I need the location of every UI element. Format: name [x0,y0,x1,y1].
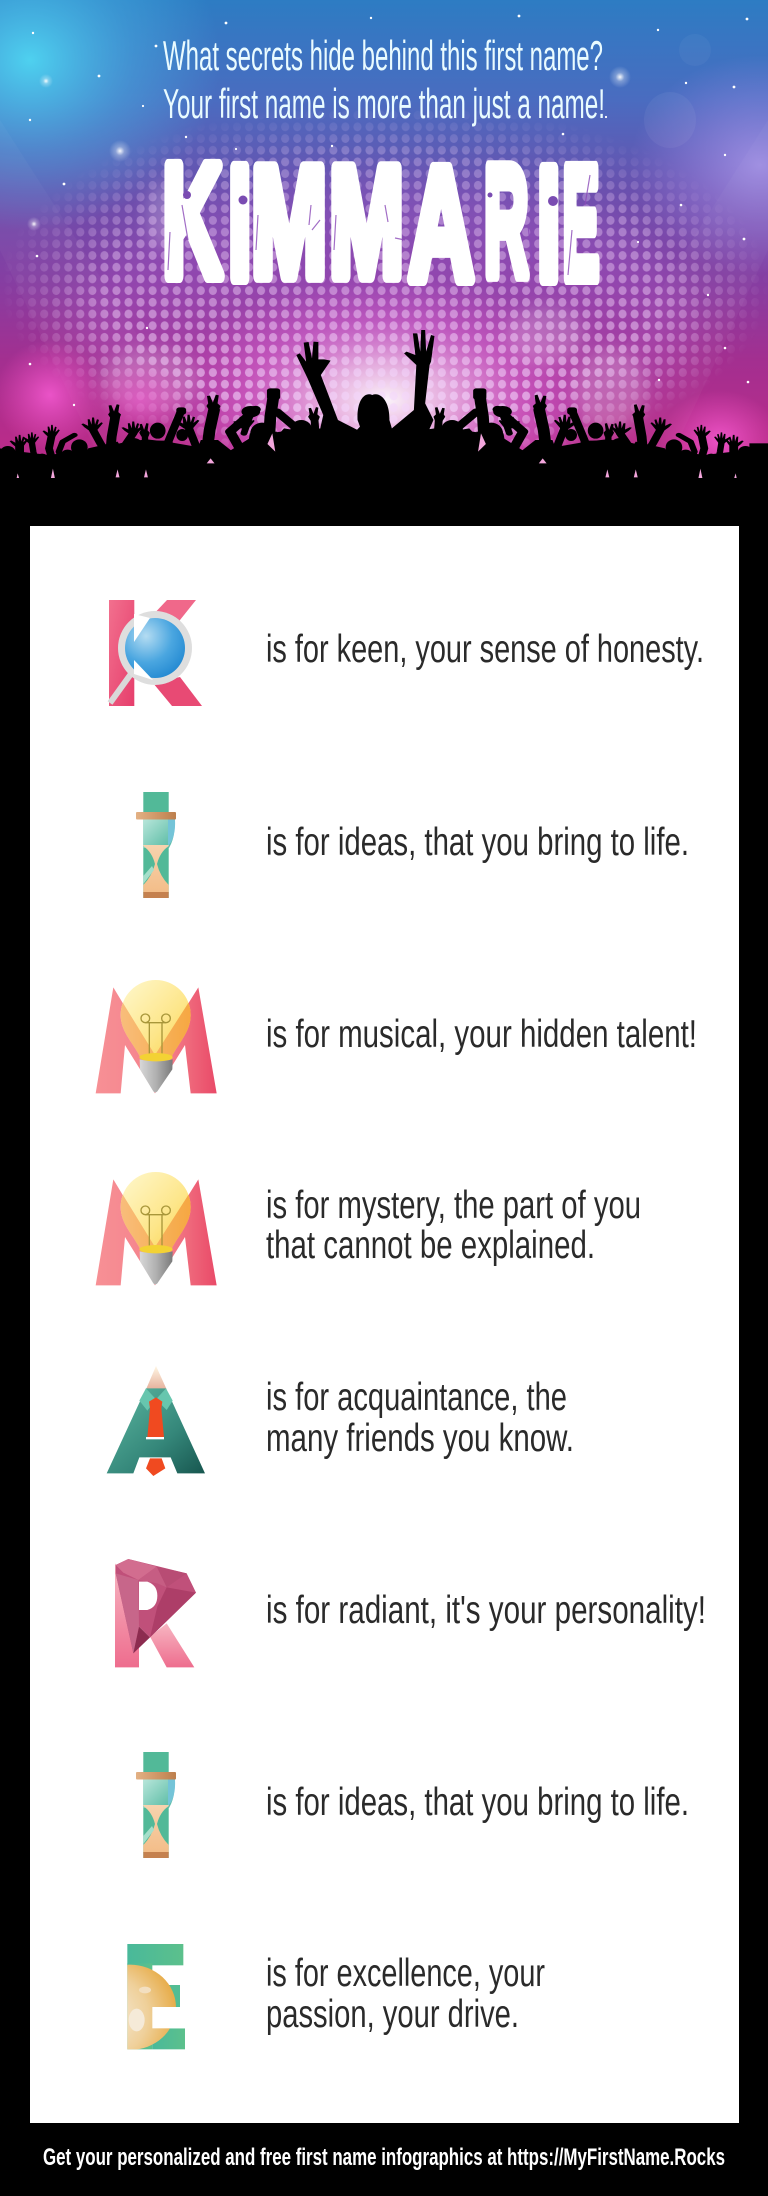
letter icon M: light bulb [96,980,217,1093]
E text: is for excellence, your [266,1952,545,1995]
M text two lines: that cannot be explained. [266,1224,595,1267]
header background [0,0,768,455]
title: KIMMARIE: I [228,135,251,313]
letter icon K: magnifying glass [109,600,202,706]
title: KIMMARIE: R [484,134,528,309]
letter icon I: hourglass [136,792,176,898]
title: KIMMARIE [162,131,599,314]
A text: many friends you know. [266,1417,574,1460]
E text [266,1952,545,2036]
title: KIMMARIE: A [408,134,474,313]
M text two lines: is for mystery, the part of you [266,1184,641,1227]
letter icon A: business suit and tie [107,1366,205,1476]
M text two lines [266,1184,641,1267]
A text [266,1376,574,1460]
sparkling stars [27,15,749,406]
letter icon R: gemstone [115,1559,196,1667]
letter icon E: moon [127,1944,185,2050]
subtitle [163,32,605,127]
title: KIMMARIE: K [162,131,222,310]
title: KIMMARIE: I [537,136,560,314]
title: KIMMARIE: E [562,135,599,313]
letter icon M: light bulb second [96,1172,217,1285]
letter icon I: hourglass second [136,1752,176,1858]
title: KIMMARIE: M [251,135,327,310]
A text: is for acquaintance, the [266,1376,567,1419]
E text: passion, your drive. [266,1993,519,2036]
title: KIMMARIE: M [329,135,404,310]
central figure [296,330,434,437]
white content panel [30,526,739,2123]
crowd silhouette [0,330,768,563]
